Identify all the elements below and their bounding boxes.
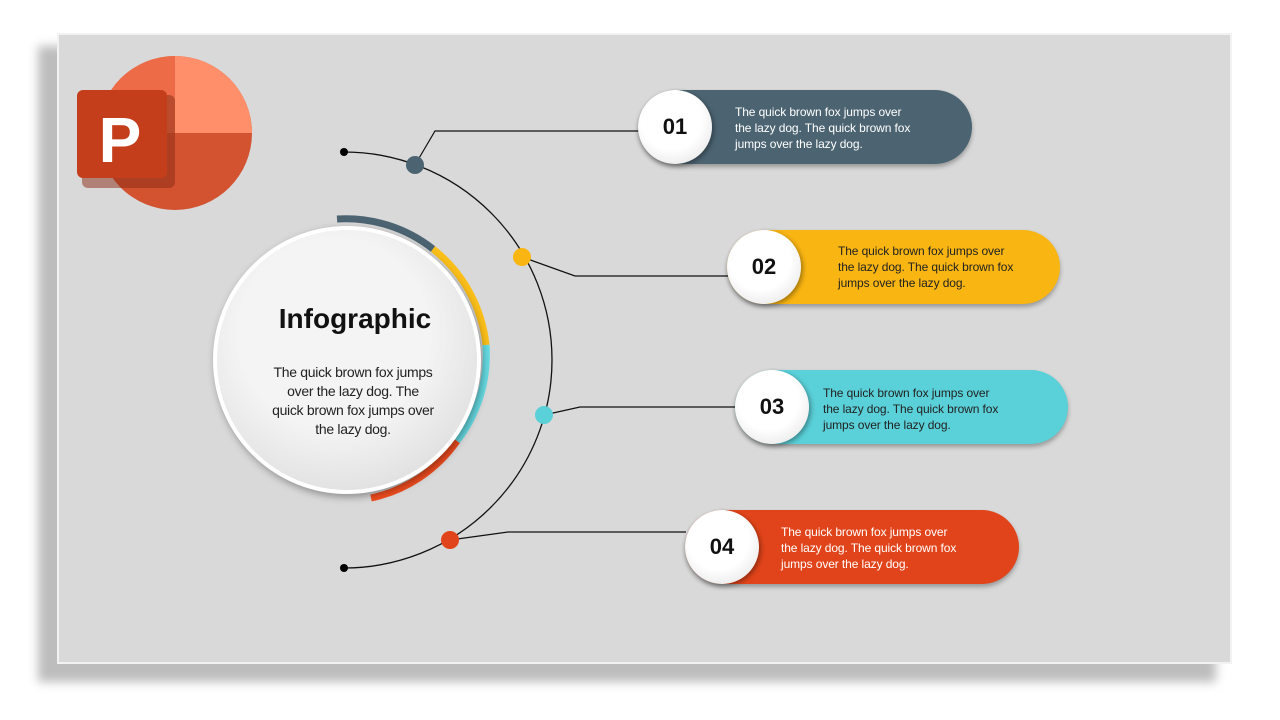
item 01: the lazy dog. The quick brown fox: [735, 121, 910, 135]
center text: quick brown fox jumps over: [272, 402, 434, 418]
item 01: 01: [663, 114, 687, 139]
center text: over the lazy dog. The: [287, 383, 419, 399]
item 02: 02: [752, 254, 776, 279]
item 02: [724, 229, 1062, 310]
item 02: The quick brown fox jumps over: [838, 244, 1004, 258]
item 04: jumps over the lazy dog.: [781, 557, 909, 571]
item 04: The quick brown fox jumps over: [781, 525, 947, 539]
item 01: The quick brown fox jumps over: [735, 105, 901, 119]
item 02: the lazy dog. The quick brown fox: [838, 260, 1013, 274]
center text: The quick brown fox jumps: [273, 364, 433, 380]
center text: [272, 364, 434, 437]
item 03: The quick brown fox jumps over: [823, 386, 989, 400]
title: Infographic: [279, 303, 431, 334]
icon: powerpoint logo: P: [99, 104, 141, 176]
item 04: 04: [710, 534, 734, 559]
item 03: jumps over the lazy dog.: [823, 418, 951, 432]
item 03: [732, 369, 1070, 450]
item 04: [682, 509, 1022, 590]
center text: the lazy dog.: [315, 421, 391, 437]
item 03: the lazy dog. The quick brown fox: [823, 402, 998, 416]
item 01: jumps over the lazy dog.: [735, 137, 863, 151]
item 02: jumps over the lazy dog.: [838, 276, 966, 290]
item 01: [636, 89, 974, 170]
item 04: the lazy dog. The quick brown fox: [781, 541, 956, 555]
item 03: 03: [760, 394, 784, 419]
